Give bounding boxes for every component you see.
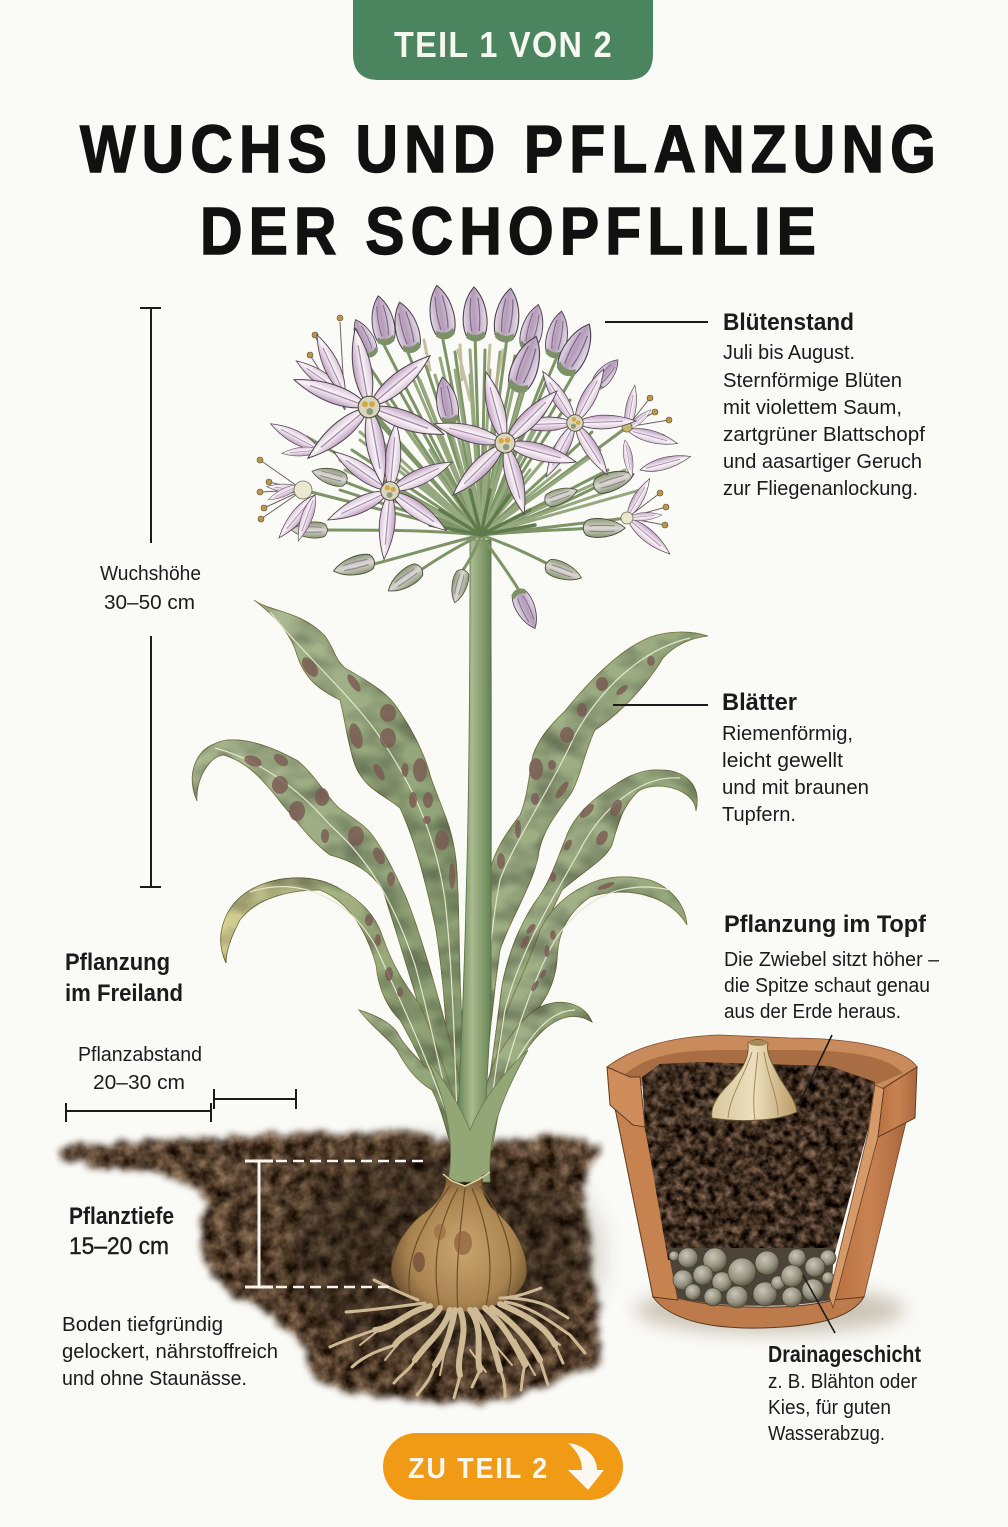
pot right inner wall: [829, 1085, 884, 1308]
leaves: [192, 600, 708, 1150]
stamens on side flowers: [260, 322, 669, 525]
label: Blätter: leicht gewellt: [722, 750, 843, 772]
label: Blütenstand: Blütenstand: [723, 309, 854, 336]
badge: Teil 1 von 2: TEIL 1 VON 2: [394, 24, 613, 65]
pot left rim: [607, 1067, 645, 1127]
soil cross-section: [59, 1131, 602, 1404]
pot shadow: [635, 1286, 905, 1334]
title: [80, 112, 942, 269]
label: Blätter: [613, 689, 869, 826]
height measurement: Wuchshöhe: 30–50 cm: [104, 592, 195, 614]
label: Pflanzung im Topf: aus der Erde heraus.: [724, 1001, 901, 1023]
planting depth marker: [245, 1161, 423, 1287]
pedicels: [303, 335, 627, 592]
stem: [456, 540, 492, 1180]
button: Zu Teil 2: [383, 1433, 623, 1500]
label: Pflanztiefe: [69, 1203, 174, 1260]
label: Blätter: Blätter: [722, 689, 797, 716]
leaf spots: [243, 655, 655, 997]
label: Drainageschicht: [768, 1341, 921, 1445]
label: Blütenstand: zartgrüner Blattschopf: [723, 424, 925, 446]
text: soil note: Boden tiefgründig: [62, 1314, 223, 1336]
label: Pflanzung im Freiland: Pflanzung: [65, 949, 170, 976]
pot left wall: [615, 1108, 678, 1300]
spacing measurement: Pflanzabstand: Pflanzabstand: [78, 1044, 202, 1066]
leaf: middle right: [480, 770, 697, 1150]
label: Pflanzung im Topf: die Spitze schaut genau: [724, 975, 930, 997]
label: Blütenstand: zur Fliegenanlockung.: [723, 478, 918, 500]
pot bottom: [653, 1297, 864, 1328]
leaf: middle left: [192, 740, 465, 1150]
text: soil note: gelockert, nährstoffreich: [62, 1341, 278, 1363]
label: Blütenstand: Juli bis August.: [723, 342, 855, 364]
pot right rim: [878, 1067, 917, 1137]
label: Pflanztiefe: Pflanztiefe: [69, 1203, 174, 1230]
pot back rim: [607, 1035, 917, 1090]
text: soil note: [62, 1314, 278, 1390]
small bulb in pot: [712, 1040, 797, 1120]
leaf sheaths at base: [428, 1050, 528, 1182]
icon: curved arrow: [568, 1443, 604, 1490]
buds: [425, 283, 458, 341]
leaf: lower right: [482, 877, 687, 1150]
label: Blütenstand: und aasartiger Geruch: [723, 451, 922, 473]
label: Blätter: Riemenförmig,: [722, 723, 853, 745]
label: Pflanzung im Topf: [724, 911, 940, 1023]
leaf midribs: [215, 612, 690, 1150]
label: Drainageschicht: Wasserabzug.: [768, 1423, 885, 1445]
spacing measurement: Pflanzabstand: 20–30 cm: [93, 1072, 185, 1094]
height measurement: Wuchshöhe: [100, 308, 201, 887]
pot soil: [642, 1062, 875, 1260]
text: soil note: und ohne Staunässe.: [62, 1368, 247, 1390]
button: Zu Teil 2: ZU TEIL 2: [408, 1453, 549, 1485]
height measurement: Wuchshöhe: Wuchshöhe: [100, 563, 201, 585]
label: Blätter: Tupfern.: [722, 804, 796, 826]
open star flowers: [497, 343, 653, 503]
title: DER SCHOPFLILIE: [200, 194, 822, 269]
leaf: upper left: [254, 600, 462, 1150]
label: Drainageschicht: z. B. Blähton oder: [768, 1371, 917, 1393]
side petals: [268, 418, 323, 456]
terracotta pot cross-section: [607, 1035, 917, 1334]
gravel bed: [668, 1248, 834, 1306]
badge: Teil 1 von 2: [353, 0, 653, 80]
label: Blütenstand: [605, 309, 925, 500]
label: Blütenstand: Sternförmige Blüten: [723, 370, 902, 392]
leaf: lower left: [221, 878, 466, 1150]
label: Pflanzung im Freiland: im Freiland: [65, 980, 183, 1007]
label: Pflanzung im Topf: Die Zwiebel sitzt höher –: [724, 949, 940, 971]
label: Pflanztiefe: 15–20 cm: [69, 1233, 169, 1260]
spacing measurement: Pflanzabstand: [66, 1044, 296, 1122]
label: Blätter: und mit braunen: [722, 777, 869, 799]
label: Blütenstand: mit violettem Saum,: [723, 397, 902, 419]
pot leader lines: [800, 1035, 835, 1333]
pot outer right side: [833, 1122, 906, 1308]
roots: [330, 1280, 585, 1398]
flower head: [257, 283, 692, 633]
label: Pflanzung im Topf: Pflanzung im Topf: [724, 911, 927, 938]
leaf: small left: [359, 1010, 462, 1150]
leaf: upper right: [466, 632, 708, 1150]
label: Drainageschicht: Drainageschicht: [768, 1341, 921, 1367]
leaf: small right: [472, 1002, 592, 1150]
bulb: [391, 1172, 527, 1312]
label: Drainageschicht: Kies, für guten: [768, 1397, 891, 1419]
label: Pflanzung im Freiland: [65, 949, 183, 1007]
